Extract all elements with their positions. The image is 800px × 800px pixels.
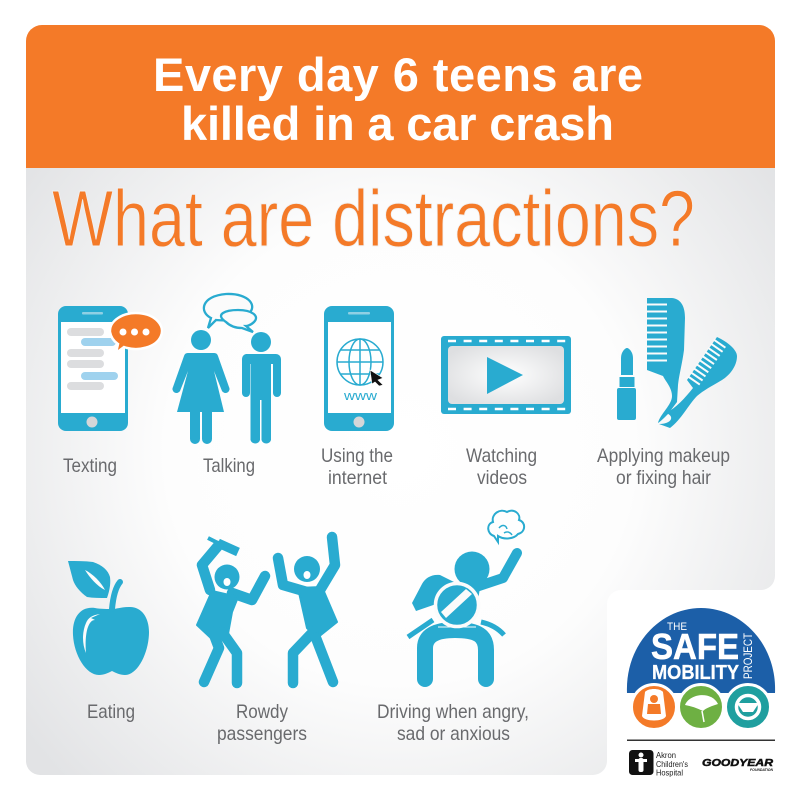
heading: headline: killed in a car crash — [181, 97, 614, 150]
logo: Goodyear Foundation: FOUNDATION — [750, 767, 773, 772]
label: Applying makeup or fixing hair — [597, 445, 730, 489]
label: Rowdy passengers: passengers — [217, 723, 307, 745]
icon: two people talking — [172, 294, 281, 444]
icon: phone with globe — [324, 306, 394, 431]
icon: two rowdy passengers — [197, 537, 337, 683]
item: rowdy passengers — [197, 537, 337, 745]
icon: angry driver — [408, 511, 524, 679]
item: watching videos — [441, 336, 571, 489]
label: Texting: Texting — [63, 455, 117, 477]
logo dome: SAFE — [651, 626, 739, 667]
label: Rowdy passengers: Rowdy — [236, 701, 288, 723]
label: Watching videos: videos — [477, 467, 527, 489]
label: Using the internet: internet — [328, 467, 388, 489]
label: Watching videos — [466, 445, 537, 489]
item: driving when angry — [377, 511, 529, 745]
item: eating — [68, 561, 149, 723]
logo: Goodyear Foundation: GOODYEAR — [702, 758, 774, 769]
label: Watching videos: Watching — [466, 445, 537, 467]
logo: Akron Children's Hospital: Children's — [656, 759, 688, 769]
label: Applying makeup or fixing hair: or fixing hair — [616, 467, 711, 489]
label: Talking: Talking — [203, 455, 255, 477]
icon: green bike helmet — [678, 684, 724, 730]
item: applying makeup — [597, 298, 737, 489]
item: texting — [58, 306, 162, 477]
panel: main background — [26, 160, 775, 775]
label: Rowdy passengers — [217, 701, 307, 745]
logo dome: PROJECT — [741, 632, 755, 679]
heading: headline — [153, 48, 643, 150]
icon: film strip with play button — [441, 336, 571, 414]
icon: apple — [68, 561, 149, 675]
icon: teal steering wheel — [726, 684, 770, 730]
label: Applying makeup or fixing hair: Applying makeup — [597, 445, 730, 467]
icon: phone with messages — [58, 306, 162, 431]
logo: Akron Children's Hospital: Hospital — [656, 768, 683, 778]
label: Using the internet — [321, 445, 393, 489]
logo: Akron Children's Hospital: Akron — [656, 750, 676, 760]
logo dome — [627, 608, 775, 693]
logo: The Safe Mobility Project — [627, 608, 775, 778]
logo: Goodyear Foundation — [702, 758, 774, 772]
label: Eating: Eating — [87, 701, 135, 723]
label: Driving when angry, sad or anxious: Driving when angry, — [377, 701, 529, 723]
heading: headline: Every day 6 teens are — [153, 48, 643, 101]
label: Driving when angry, sad or anxious — [377, 701, 529, 745]
item: using the internet — [321, 306, 394, 489]
label: Using the internet: Using the — [321, 445, 393, 467]
logo dome: MOBILITY — [652, 662, 740, 684]
icon: phone with globe: www — [343, 388, 378, 403]
panel: orange header — [26, 25, 775, 168]
item: talking — [172, 294, 281, 477]
logo: Akron Children's Hospital — [629, 750, 688, 778]
icon: lipstick and combs — [617, 298, 737, 428]
label: Driving when angry, sad or anxious: sad or anxious — [397, 723, 510, 745]
icon: orange child seat — [632, 684, 676, 730]
logo dome: THE — [667, 621, 687, 633]
